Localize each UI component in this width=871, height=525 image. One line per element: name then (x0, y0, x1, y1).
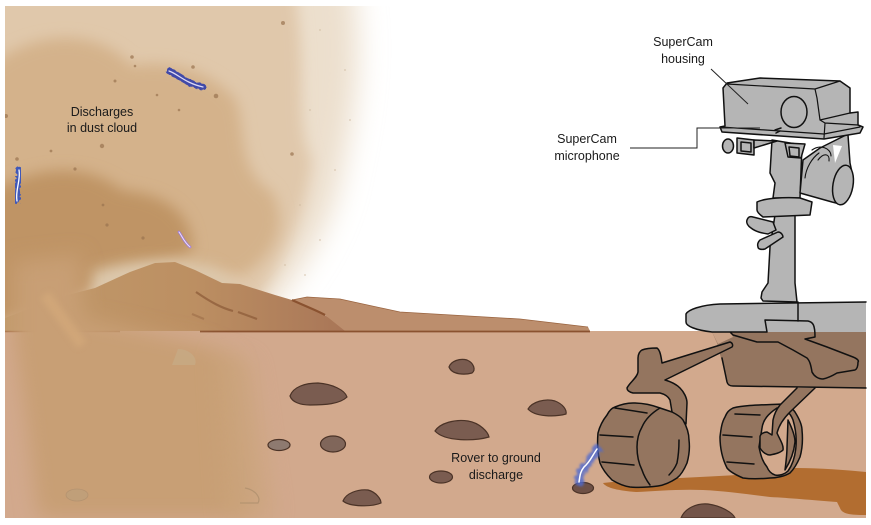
discharge: small violet (179, 232, 190, 247)
label: rover to ground discharge: discharge (469, 468, 523, 482)
faded rocks in dust (66, 349, 259, 503)
rover deck (686, 302, 866, 332)
rover shadow (603, 468, 866, 515)
front rocker arm (627, 342, 733, 424)
SuperCam housing (720, 78, 863, 139)
discharge: left edge (17, 170, 19, 201)
camera lenses (722, 138, 805, 158)
label: SuperCam microphone: SuperCam (557, 132, 617, 146)
label: SuperCam microphone: microphone (554, 149, 620, 163)
lens circle (781, 96, 807, 128)
dust column over hills and ground (14, 255, 275, 518)
ground (5, 331, 866, 518)
side drum (800, 127, 862, 204)
label: discharges in dust cloud: in dust cloud (67, 121, 137, 135)
microphone (775, 128, 781, 133)
rear wheel (720, 404, 802, 479)
mast collar (757, 198, 812, 217)
dust cloud (0, 0, 358, 340)
rover lower body (712, 332, 866, 388)
label: rover to ground discharge: Rover to ground (451, 451, 541, 465)
label: discharges in dust cloud: Discharges (71, 105, 133, 119)
rear suspension leg (760, 388, 815, 455)
pale dust above the ridge (86, 254, 221, 290)
label: SuperCam housing: SuperCam (653, 35, 713, 49)
mast arm pegs (747, 217, 776, 234)
discharge: top of cloud (169, 71, 203, 87)
mast upper (770, 140, 802, 198)
discharge: rover to ground (579, 449, 597, 482)
label: SuperCam housing: housing (661, 52, 705, 66)
dust specks (4, 21, 294, 240)
faint dust on white (284, 29, 351, 276)
wheel opening (759, 408, 796, 475)
front wheel (598, 403, 689, 487)
leader lines (630, 69, 760, 148)
distant hills (5, 262, 590, 332)
rover (598, 78, 866, 487)
mast lower (761, 215, 797, 302)
rocks (268, 359, 735, 518)
